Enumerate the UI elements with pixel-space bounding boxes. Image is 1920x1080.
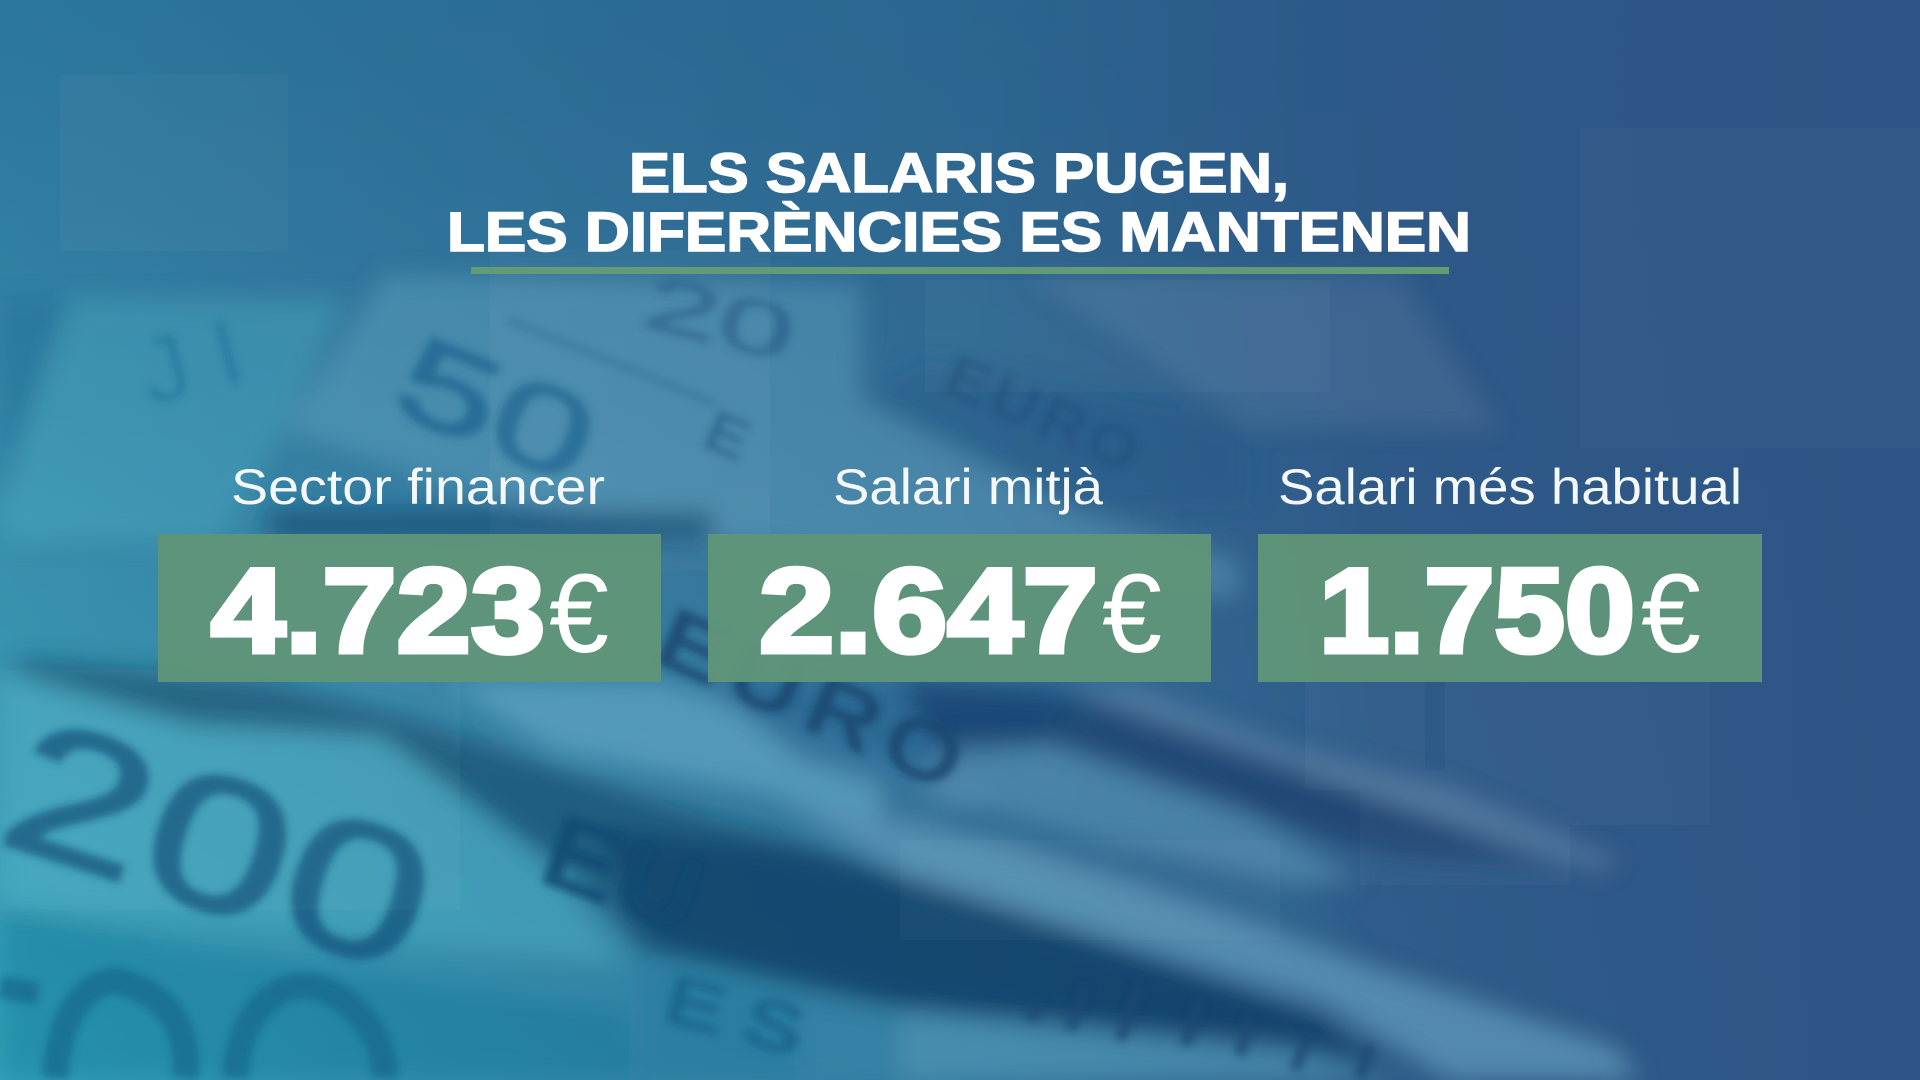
background: blurred euro banknotes photo: EU <box>527 791 718 956</box>
label: Salari mitjà: Salari mitjà <box>833 459 1103 515</box>
value: 1.750€: € <box>1641 551 1701 676</box>
value: 2.647€: 2.647 <box>759 544 1098 678</box>
value box <box>1258 534 1762 682</box>
label: Sector financer: Sector financer <box>231 459 605 515</box>
background: blurred euro banknotes photo: EURO <box>935 343 1154 488</box>
title: ELS SALARIS PUGEN, <box>629 141 1289 204</box>
title: LES DIFERÈNCIES ES MANTENEN <box>447 200 1471 263</box>
background: blurred euro banknotes photo: ES <box>656 960 834 1077</box>
value box <box>158 534 661 682</box>
title underline <box>471 267 1449 274</box>
background: blurred euro banknotes photo: EURO <box>642 589 988 814</box>
background: blurred euro banknotes photo: 50 <box>378 310 614 509</box>
value box <box>708 534 1211 682</box>
background: blurred euro banknotes photo: J I <box>128 298 253 424</box>
value: 1.750€: 1.750 <box>1319 544 1635 678</box>
background: blurred euro banknotes photo: E <box>695 397 760 474</box>
label: Salari més habitual: Salari més habitual <box>1278 459 1742 515</box>
value: 2.647€: € <box>1102 551 1162 676</box>
card: Salari més habitual <box>1258 459 1762 682</box>
card: Sector financer <box>158 459 661 682</box>
background: blurred euro banknotes photo: 20 <box>636 259 803 378</box>
value: 4.723€: 4.723 <box>211 544 545 678</box>
value: 4.723€: € <box>549 551 609 676</box>
title <box>447 141 1471 263</box>
card: Salari mitjà <box>708 459 1211 682</box>
